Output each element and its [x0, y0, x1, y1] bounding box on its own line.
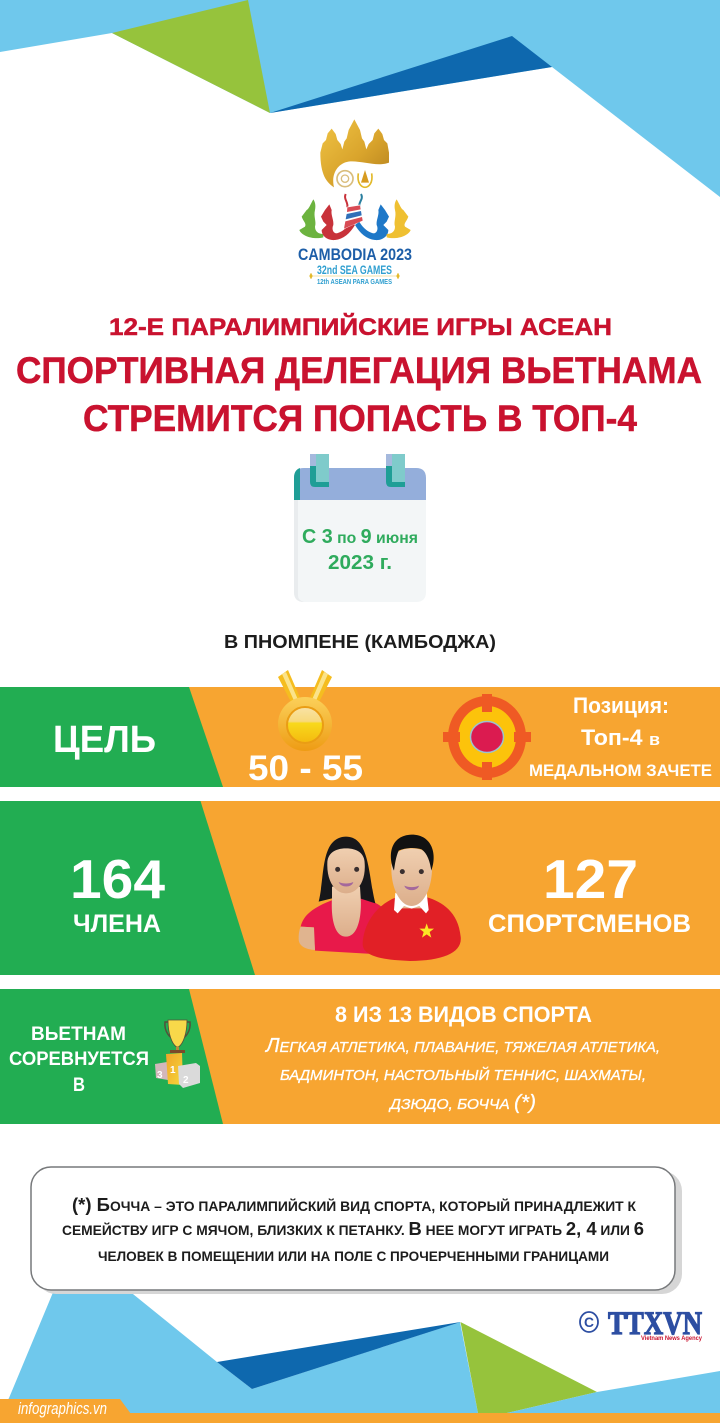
icon: trophy on podium: 3 [157, 1070, 163, 1081]
logo: text: 12th ASEAN PARA GAMES [317, 277, 392, 286]
calendar date text [302, 526, 418, 574]
panel: goal [0, 670, 720, 788]
note text [62, 1195, 644, 1264]
title: СПОРТИВНАЯ ДЕЛЕГАЦИЯ ВЬЕТНАМА [16, 350, 702, 391]
icon: gold medal [278, 670, 332, 751]
athletes stat [488, 848, 691, 938]
logo: naga figures [299, 194, 411, 240]
man [363, 835, 461, 961]
position text: МЕДАЛЬНОМ ЗАЧЕТЕ [529, 761, 712, 780]
bottom background shapes [0, 1290, 720, 1423]
competes label: ВЬЕТНАМ [31, 1024, 126, 1045]
panel: delegation [0, 801, 720, 975]
sports list: ДЗЮДО, БОЧЧА (*) [388, 1092, 536, 1114]
woman [299, 837, 383, 954]
calendar date text: 2023 г. [328, 552, 392, 574]
logo: text: 32nd SEA GAMES [317, 265, 392, 277]
members stat: 164 [70, 848, 165, 910]
logo: golden crown [320, 119, 389, 187]
athletes stat: 127 [543, 848, 638, 910]
logo: text [298, 245, 412, 286]
athletes stat: СПОРТСМЕНОВ [488, 910, 691, 938]
calendar date text: С 3 по 9 июня [302, 526, 418, 548]
top background shapes [0, 0, 720, 197]
competes label: СОРЕВНУЕТСЯ [9, 1049, 149, 1070]
note text: СЕМЕЙСТВУ ИГР С МЯЧОМ, БЛИЗКИХ К ПЕТАНКУ. В НЕЕ МОГУТ ИГРАТЬ 2, 4 ИЛИ 6 [62, 1219, 644, 1239]
note text: ЧЕЛОВЕК В ПОМЕЩЕНИИ ИЛИ НА ПОЛЕ С ПРОЧЕРЧЕННЫМИ ГРАНИЦАМИ [98, 1249, 609, 1264]
TTXVN logo [580, 1306, 702, 1342]
logo: Cambodia 2023 SEA Games [298, 119, 412, 286]
title: СТРЕМИТСЯ ПОПАСТЬ В ТОП-4 [83, 398, 637, 439]
sports heading: 8 ИЗ 13 ВИДОВ СПОРТА [335, 1002, 592, 1027]
competes label [9, 1024, 149, 1096]
note box [31, 1167, 682, 1294]
source tab: infographics.vn [18, 1399, 107, 1418]
sports list: БАДМИНТОН, НАСТОЛЬНЫЙ ТЕННИС, ШАХМАТЫ, [280, 1066, 646, 1084]
logo: text: CAMBODIA 2023 [298, 245, 412, 264]
panel: sports [0, 989, 720, 1124]
calendar with dates [294, 454, 426, 602]
icon: trophy on podium: 1 [170, 1065, 176, 1076]
position text: Позиция: [573, 693, 669, 718]
icon: target [443, 694, 531, 780]
sports list: ЛЕГКАЯ АТЛЕТИКА, ПЛАВАНИЕ, ТЯЖЕЛАЯ АТЛЕТИКА, [264, 1035, 660, 1057]
TTXVN logo: Vietnam News Agency [641, 1335, 702, 1342]
title [16, 313, 702, 439]
competes label: В [73, 1075, 85, 1096]
icon: two athletes [299, 835, 461, 961]
goal label: ЦЕЛЬ [53, 719, 156, 761]
TTXVN logo: C [584, 1314, 594, 1330]
members stat: ЧЛЕНА [73, 910, 161, 938]
position text: Топ-4 в [581, 725, 660, 750]
position text [529, 693, 712, 780]
note text: (*) БОЧЧА – ЭТО ПАРАЛИМПИЙСКИЙ ВИД СПОРТА, КОТОРЫЙ ПРИНАДЛЕЖИТ К [72, 1195, 637, 1215]
sports list [264, 1035, 660, 1114]
icon: trophy on podium: 2 [183, 1075, 189, 1086]
location heading: В ПНОМПЕНЕ (КАМБОДЖА) [224, 632, 496, 652]
members stat [70, 848, 165, 938]
icon: trophy on podium [155, 1020, 200, 1088]
medal count: 50 - 55 [248, 749, 363, 788]
title: 12-Е ПАРАЛИМПИЙСКИЕ ИГРЫ АСЕАН [109, 313, 612, 341]
